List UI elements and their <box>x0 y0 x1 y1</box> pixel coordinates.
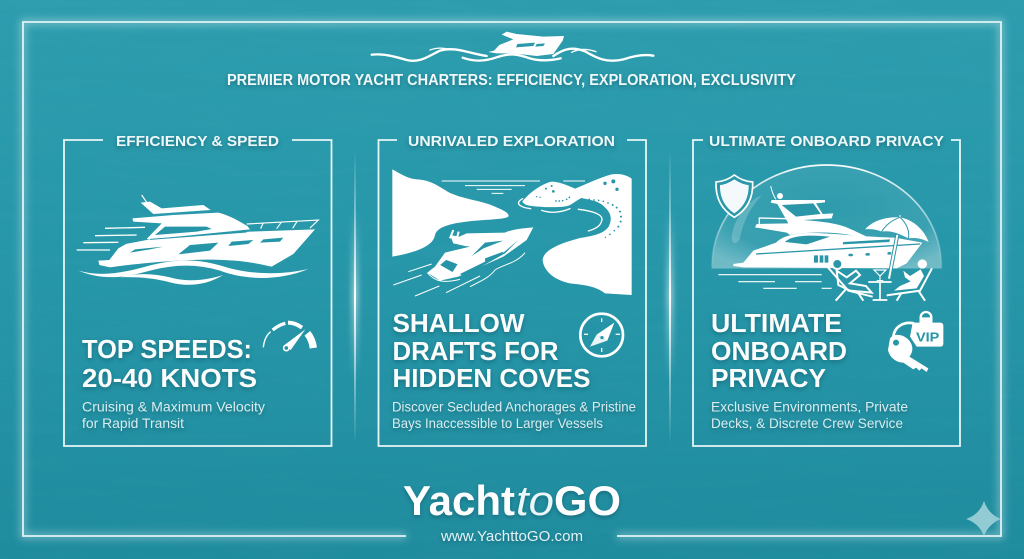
stat heading <box>392 308 590 393</box>
description <box>82 398 265 431</box>
channel highlight lines <box>519 199 602 231</box>
panel: ultimate onboard privacy <box>693 133 960 446</box>
panel heading: EFFICIENCY & SPEED <box>116 133 279 150</box>
stat heading: SHALLOW <box>392 308 525 338</box>
panel frame <box>64 140 332 446</box>
header wave and yacht icon <box>372 32 653 61</box>
logo: YachttoGO: to <box>516 477 554 524</box>
stat heading <box>82 334 257 393</box>
table and cocktail <box>868 282 892 300</box>
icon: speeding yacht <box>77 195 318 285</box>
stat heading: 20-40 KNOTS <box>82 363 257 393</box>
stat heading: ONBOARD <box>711 336 847 366</box>
description <box>711 398 908 431</box>
panel: unrivaled exploration <box>378 133 646 446</box>
icon: vip key: VIP <box>916 330 940 344</box>
umbrella <box>865 217 929 242</box>
divider glow left <box>352 150 358 445</box>
glass dome <box>712 165 942 268</box>
description: Cruising & Maximum Velocity <box>82 398 265 414</box>
description: Exclusive Environments, Private <box>711 398 908 414</box>
icon: vip key <box>888 312 943 372</box>
illustration: coves and yacht <box>392 169 632 296</box>
lounger left person <box>827 259 873 301</box>
logo: YachttoGO: Yacht <box>403 477 515 524</box>
panel heading: ULTIMATE ONBOARD PRIVACY <box>709 133 944 150</box>
panel heading: UNRIVALED EXPLORATION <box>408 133 615 150</box>
panel frame <box>693 140 960 446</box>
website url: www.YachttoGO.com <box>440 528 583 545</box>
description <box>392 398 636 431</box>
logo: YachttoGO: GO <box>554 477 621 524</box>
icon: compass <box>580 314 623 356</box>
right coastline and islands <box>522 174 632 295</box>
stat heading: ULTIMATE <box>711 308 842 338</box>
description: Bays Inaccessible to Larger Vessels <box>392 415 603 431</box>
icon: speedometer gauge <box>263 323 313 351</box>
yacht <box>427 227 533 281</box>
logo: YachttoGO <box>403 477 621 524</box>
yacht superstructure <box>755 200 868 237</box>
yacht hull <box>733 233 922 268</box>
lounger right person <box>887 259 932 301</box>
panel: efficiency and speed <box>64 133 332 446</box>
title: PREMIER MOTOR YACHT CHARTERS: EFFICIENCY, EXPLORATION, EXCLUSIVITY <box>227 72 796 89</box>
water lines <box>718 275 832 288</box>
illustration: yacht under privacy dome <box>712 165 942 301</box>
stat heading: DRAFTS FOR <box>392 336 559 366</box>
stat heading <box>711 308 847 393</box>
stat heading: HIDDEN COVES <box>392 363 590 393</box>
stat heading: PRIVACY <box>711 363 826 393</box>
description: Decks, & Discrete Crew Service <box>711 415 903 431</box>
description: for Rapid Transit <box>82 415 184 431</box>
icon: sparkle <box>966 501 1001 536</box>
divider glow right <box>667 150 673 445</box>
description: Discover Secluded Anchorages & Pristine <box>392 398 636 414</box>
stat heading: TOP SPEEDS: <box>82 334 252 364</box>
icon: shield <box>716 175 753 217</box>
left headland <box>392 169 509 257</box>
panel frame <box>378 140 646 446</box>
